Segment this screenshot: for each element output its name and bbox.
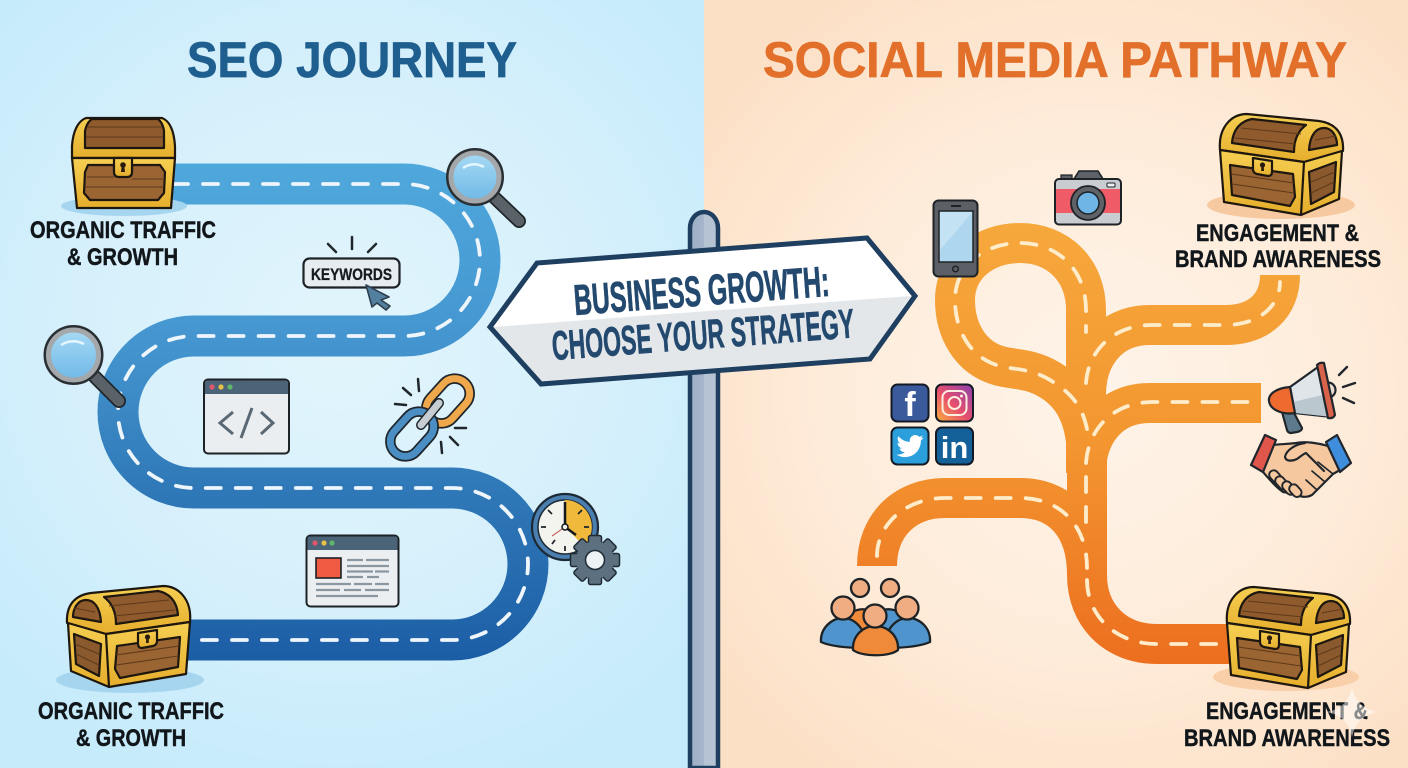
icon: treasure chest top left [61,118,187,216]
icon: smartphone [934,200,978,276]
icon: linkedin: in [941,430,968,465]
icon: camera [1055,171,1121,224]
icon: instagram [936,384,973,422]
icon: twitter [892,428,928,464]
icon: keywords button with cursor: KEYWORDS [311,266,392,284]
label: organic traffic top: & GROWTH [67,244,178,271]
icon: clock and gear [532,494,620,584]
icon: people group [821,579,930,655]
label: organic traffic bottom: ORGANIC TRAFFIC [38,698,224,725]
road: SEO winding path [118,184,528,640]
label: organic traffic top: ORGANIC TRAFFIC [30,217,216,244]
label: organic traffic bottom: & GROWTH [76,725,186,752]
icon: facebook: f [904,386,916,424]
sign text: BUSINESS GROWTH: [572,258,831,325]
icon: sparkle watermark [1327,687,1377,737]
label: engagement bottom: ENGAGEMENT & [1206,698,1368,725]
title: Social Media Pathway: SOCIAL MEDIA PATHWAY [763,32,1347,88]
icon: chain link [384,372,476,463]
icon: article window [306,536,398,606]
icon: handshake [1251,435,1351,499]
label: organic traffic top [30,217,216,271]
label: organic traffic bottom [38,698,224,752]
icon: keywords button with cursor [304,237,400,310]
icon: social media grid [892,384,973,465]
icon: magnifier top [449,151,519,221]
signpost [490,212,915,768]
icon: megaphone [1269,363,1355,433]
signpost pole [690,212,718,768]
label: engagement top [1175,220,1381,273]
road: social branching path [877,243,1280,644]
icon: magnifier left [46,328,119,401]
label: engagement top: ENGAGEMENT & [1196,220,1359,247]
icon: treasure chest bottom right [1213,587,1359,691]
label: engagement bottom [1184,698,1390,752]
icon: treasure chest top right [1207,114,1355,219]
sign text: CHOOSE YOUR STRATEGY [550,300,856,369]
icon: treasure chest bottom left [56,586,204,693]
panel: SEO journey [0,0,704,768]
sign board [490,238,915,384]
sign text [550,258,856,369]
icon: code window [204,380,289,454]
title: SEO Journey: SEO JOURNEY [187,32,517,88]
panel: social media pathway [704,0,1408,768]
